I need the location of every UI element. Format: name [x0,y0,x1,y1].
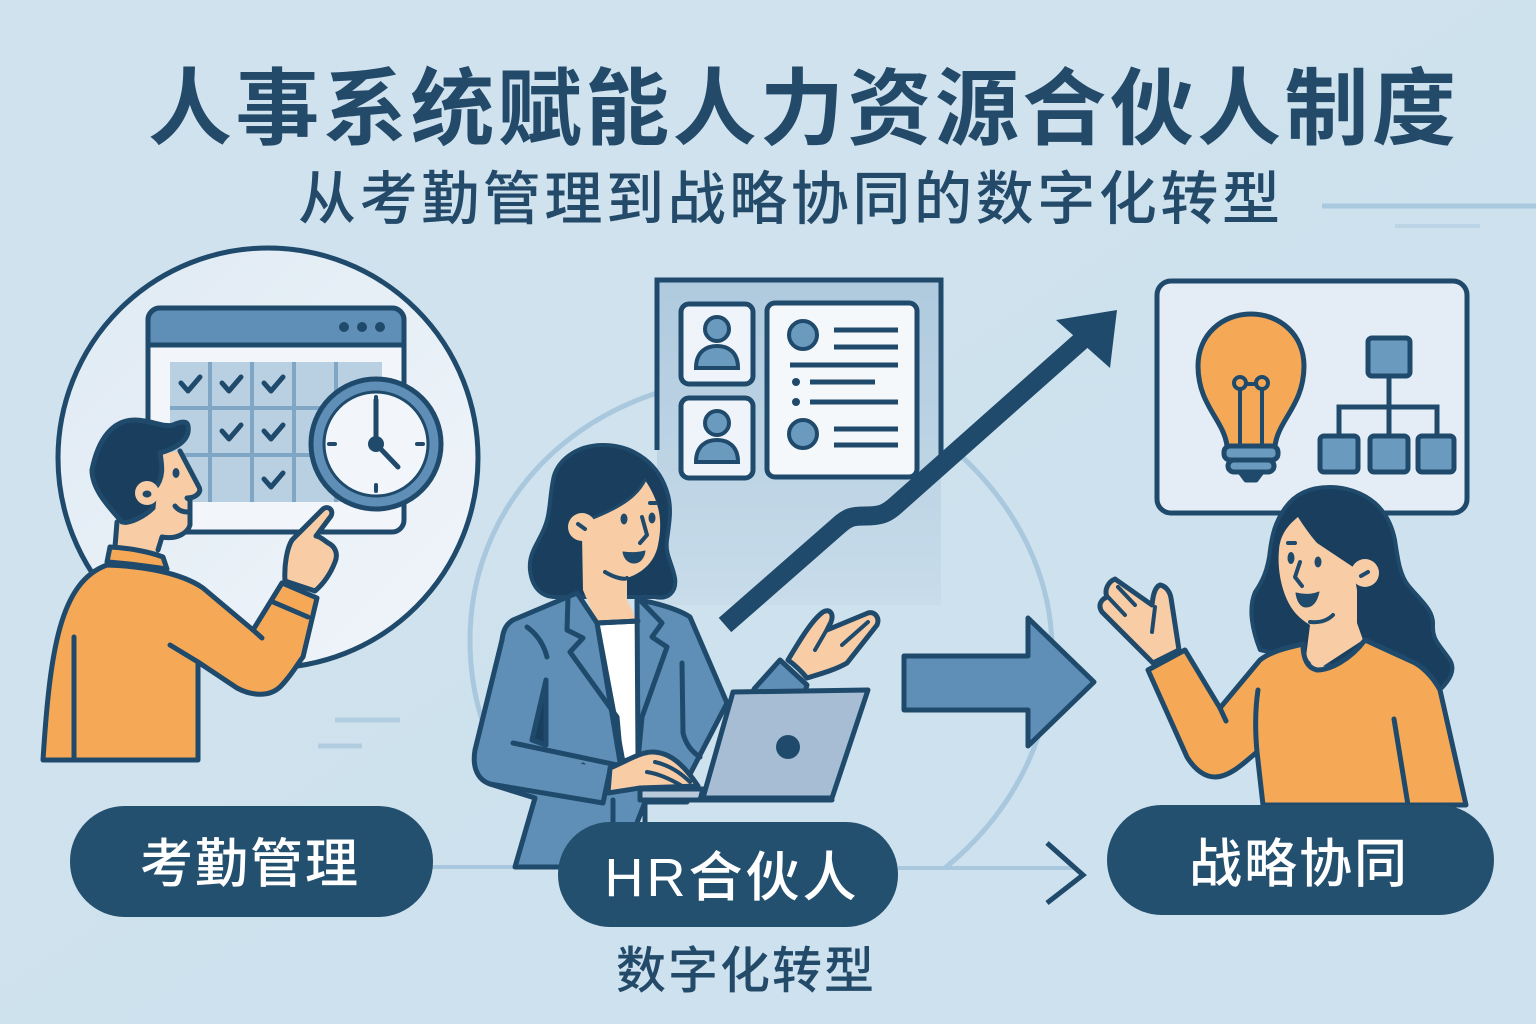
figure: man pointing [43,420,336,760]
figure: strategy woman [1100,487,1466,805]
figure: HR partner woman [474,445,878,867]
icon: profile card bottom [681,398,753,478]
arrow: growth trend [725,340,1082,625]
panel: strategy board [1157,281,1467,513]
caption: digital transformation: 数字化转型 [616,943,876,999]
arrow: large right arrow [904,618,1094,746]
pill: strategic alignment: 战略协同 [1189,835,1409,894]
icon: laptop [640,690,868,800]
pill: attendance management: 考勤管理 [140,835,360,894]
pill: HR partner: HR合伙人 [604,848,860,908]
icon: calendar window [148,308,404,532]
icon: clock [311,379,441,509]
icon: chevron arrow [1047,843,1083,903]
pill: strategic alignment [1107,805,1494,915]
background ring and connector [432,392,1075,868]
pill: HR partner [558,822,898,927]
title: 人事系统赋能人力资源合伙人制度 [148,62,1456,156]
icon: profile card top [681,304,753,384]
icon: org chart [1320,338,1454,472]
panel: attendance circle [58,248,478,668]
panel: profile dashboard [657,280,941,605]
icon: data list card [767,303,917,477]
arrow: growth arrow head [1056,310,1117,368]
icon: light bulb [1198,314,1304,480]
pill: attendance management [70,806,433,917]
subtitle: 从考勤管理到战略协同的数字化转型 [298,167,1280,232]
